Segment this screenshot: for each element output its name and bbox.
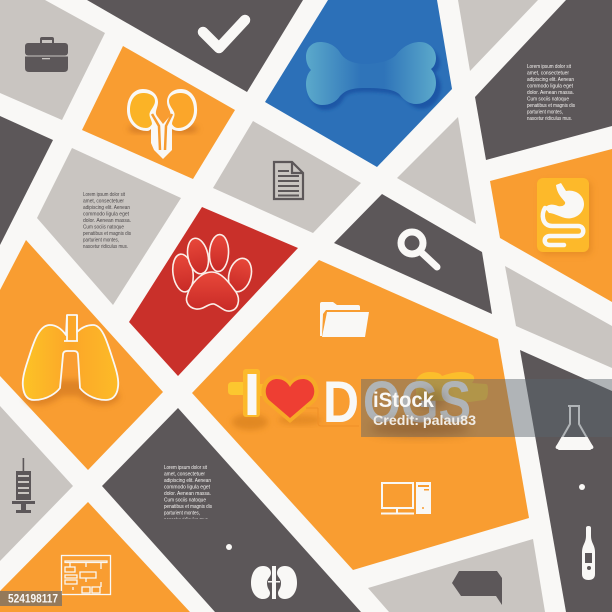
panel: kidney orange (82, 46, 235, 179)
watermark: iStock credit band: Credit: palau83 (373, 413, 477, 428)
panel: gray right (505, 266, 612, 368)
text block: lorem ipsum bottom (164, 465, 212, 523)
watermark: iStock credit band: iStock (373, 389, 434, 412)
panel: dark magnifier (334, 194, 492, 314)
panel: document gray (213, 121, 361, 233)
watermark: iStock credit band (361, 379, 612, 437)
panel: dark top right (475, 0, 612, 160)
panel: gray triangle center right (397, 117, 476, 224)
panel: stomach orange (490, 149, 612, 302)
text block: lorem ipsum top right (527, 64, 575, 122)
text block: lorem ipsum top right: dolor. Aenean massa. (527, 90, 574, 96)
dot (226, 544, 232, 550)
text block: lorem ipsum top right: Cum sociis natoque (527, 96, 569, 102)
text block: lorem ipsum top right: penatibus et magnis dis (527, 103, 575, 109)
text block: lorem ipsum bottom: parturient montes, (164, 510, 200, 516)
panel: gray bottom (368, 539, 545, 612)
icon: flowchart (62, 556, 110, 594)
panel: checkmark dark (87, 0, 303, 92)
icon: flask (556, 405, 593, 449)
icon: magnifier (401, 232, 437, 267)
text block: lorem ipsum gray: commodo ligula eget (83, 212, 130, 218)
text block: lorem ipsum top right: commodo ligula eget (527, 84, 574, 90)
text block: lorem ipsum top right: Lorem ipsum dolor sit (527, 64, 572, 70)
panel: dark kidneys (102, 408, 361, 612)
icon: speech bubble (452, 571, 502, 605)
dot (579, 484, 585, 490)
text block: lorem ipsum gray: nascetur ridiculus mus. (83, 244, 128, 250)
watermark: image id: 524198117 (8, 594, 58, 606)
icon: computer (381, 483, 414, 514)
icon: checkmark (203, 20, 245, 48)
panel: big orange (192, 260, 529, 570)
text block: lorem ipsum bottom: Lorem ipsum dolor sit (164, 465, 208, 471)
text block: lorem ipsum gray: parturient montes, (83, 238, 119, 244)
panel: blue bone (265, 0, 452, 167)
text block: lorem ipsum gray: Lorem ipsum dolor sit (83, 192, 126, 198)
icon: kidneys white (251, 566, 297, 599)
text block: lorem ipsum top right: adipiscing elit. Aenean (527, 77, 574, 83)
panel: red paw (129, 207, 298, 376)
panel: dark right (520, 350, 612, 612)
panel: lungs orange (0, 240, 163, 470)
text block: lorem ipsum gray: adipiscing elit. Aenean (83, 205, 130, 211)
text block: lorem ipsum top right: nascetur ridiculus mus. (527, 116, 572, 122)
text block: lorem ipsum bottom: nascetur ridiculus mus. (164, 517, 209, 523)
icon: bone sticker (306, 42, 441, 110)
icon: thermometer (582, 526, 595, 580)
text block: lorem ipsum bottom: penatibus et magnis dis (164, 504, 212, 510)
text block: lorem ipsum bottom: adipiscing elit. Aenean (164, 478, 211, 484)
panel: dark left (0, 116, 53, 245)
icon: folder (320, 302, 369, 337)
icon: briefcase (25, 37, 68, 72)
text block: lorem ipsum top right: amet, consectetuer (527, 70, 569, 76)
title: I love dogs sticker (228, 369, 488, 435)
text block: lorem ipsum gray: penatibus et magnis dis (83, 231, 131, 237)
icon: syringe (12, 458, 35, 513)
title: I love dogs sticker: OGS (363, 370, 471, 435)
watermark: image id (0, 591, 62, 606)
icon: paw sticker (170, 234, 255, 311)
panel: briefcase gray (0, 0, 105, 120)
icon: kidney sticker (127, 89, 198, 159)
panel: orange bottom left (0, 502, 190, 612)
panel: gray triangle top (458, 0, 538, 71)
icon: computer tower (416, 482, 431, 514)
icon: lungs sticker (23, 315, 120, 405)
text block: lorem ipsum gray: Cum sociis natoque (83, 224, 124, 230)
text block: lorem ipsum bottom: dolor. Aenean massa. (164, 491, 211, 497)
icon: document (274, 162, 303, 199)
text block: lorem ipsum gray (83, 192, 131, 250)
icon: stomach sticker (537, 178, 592, 255)
text block: lorem ipsum gray: amet, consectetuer (83, 198, 124, 204)
text block: lorem ipsum bottom: amet, consectetuer (164, 472, 205, 478)
title: I love dogs sticker: D (323, 370, 359, 435)
text block: lorem ipsum gray: dolor. Aenean massa. (83, 218, 131, 224)
panel: gray syringe (0, 406, 73, 561)
panel: lorem gray (37, 148, 181, 305)
text block: lorem ipsum top right: parturient montes, (527, 110, 563, 116)
text block: lorem ipsum bottom: commodo ligula eget (164, 484, 211, 490)
text block: lorem ipsum bottom: Cum sociis natoque (164, 498, 206, 504)
